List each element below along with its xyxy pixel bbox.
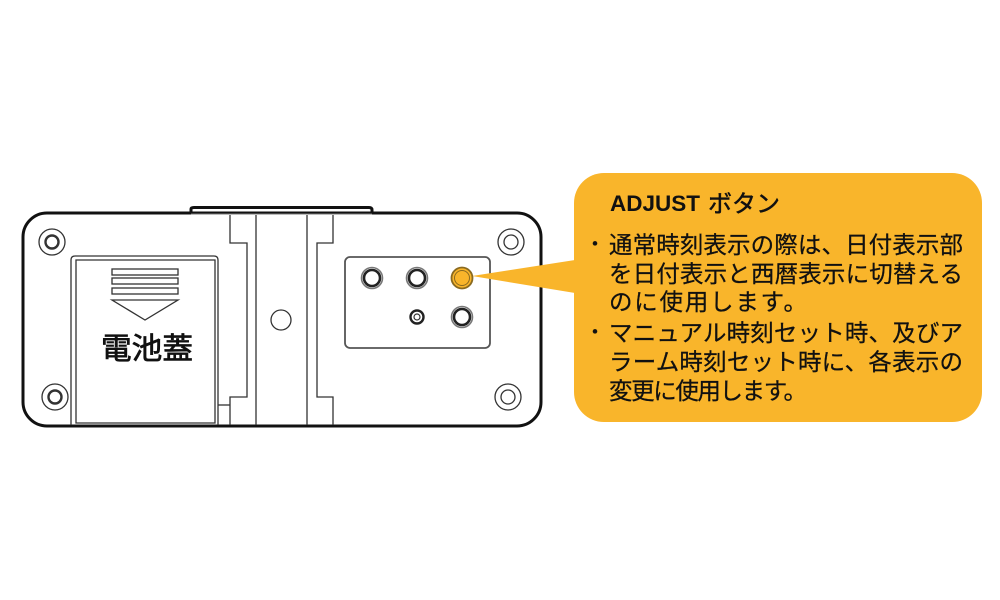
callout first item: 通常時刻表示の際は、日付表示部: [609, 232, 963, 258]
callout second item: [585, 320, 963, 404]
callout first item: ・: [585, 234, 605, 256]
arrow stripes and triangle: [112, 269, 178, 320]
battery cover: [71, 256, 218, 425]
buttons: [362, 268, 472, 328]
callout pointer: [472, 260, 575, 293]
callout first item: [585, 232, 963, 315]
callout heading: ADJUST: [610, 191, 701, 216]
corner screws: [39, 229, 524, 410]
callout first item: を日付表示と西暦表示に切替える: [609, 261, 963, 287]
callout second item: マニュアル時刻セット時、及びア: [609, 320, 963, 346]
callout heading: ボタン: [708, 191, 780, 218]
callout second item: 変更に使用します。: [609, 378, 807, 404]
callout second item: ラーム時刻セット時に、各表示の: [609, 349, 963, 375]
callout heading: [610, 191, 780, 218]
callout first item: のに使用します。: [609, 289, 807, 315]
callout panel: [574, 173, 982, 422]
center slide rail: [218, 215, 333, 425]
device body: [23, 208, 541, 426]
highlighted ADJUST button: [452, 268, 472, 288]
label: battery cover: 電池蓋: [101, 333, 193, 366]
callout second item: ・: [585, 322, 605, 344]
button panel: [345, 257, 490, 348]
